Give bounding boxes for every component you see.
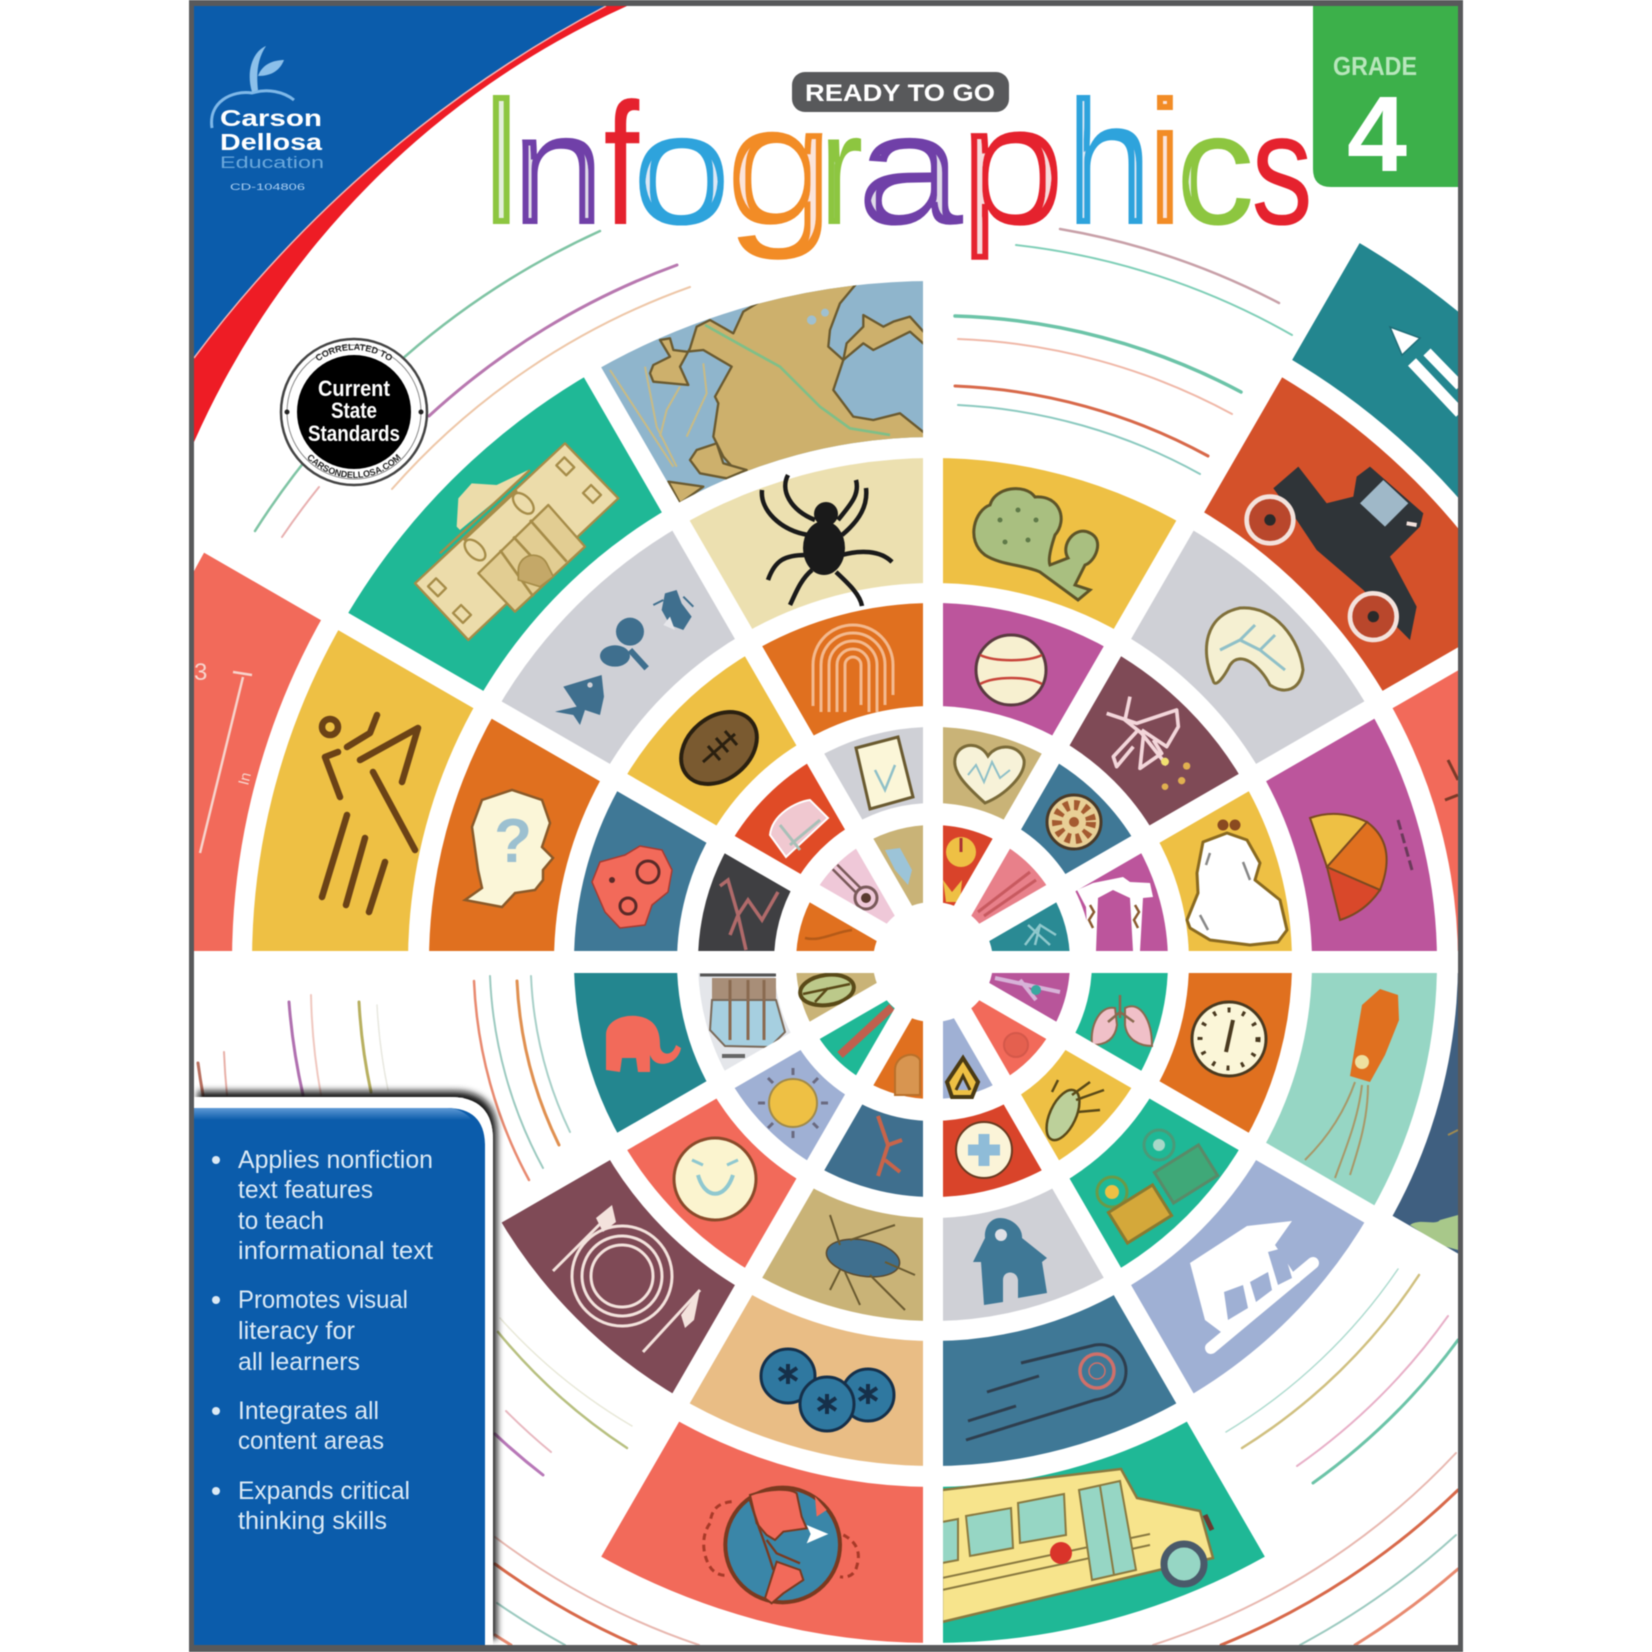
- ring 5 segment: school bus: [933, 1417, 1274, 1643]
- ring 3 segment: fingerprint: [762, 602, 924, 736]
- ring 3 segment: schoolhouse: [942, 1188, 1104, 1322]
- ring 3 segment: asteroid: [573, 790, 707, 952]
- title: Infographics: h: [1066, 63, 1152, 262]
- ring 3 segment: keys: [1069, 1098, 1240, 1268]
- grade badge: [1313, 6, 1458, 194]
- ring 4 segment: blueberries: [681, 1290, 933, 1466]
- ring 6 segment: coral ruler: In: [235, 771, 255, 787]
- ring 3 segment: cockroach: [762, 1188, 924, 1322]
- ring 2 segment: lungs: [1074, 972, 1168, 1072]
- ring 5 segment: globe: [592, 1417, 933, 1643]
- bullet: nonfiction text features: informational text: [238, 1237, 433, 1265]
- ring 1 segment: water: [873, 824, 924, 906]
- bullet: critical thinking: thinking skills: [238, 1507, 387, 1535]
- ring 5 segment: navy right edge: [1388, 962, 1614, 1302]
- title: Infographics: f: [604, 68, 640, 262]
- ready to go pill: READY TO GO: [805, 80, 995, 107]
- ring 3 segment: smile: [626, 1098, 797, 1268]
- wheel of topic segments: [193, 242, 1459, 1644]
- bullet: nonfiction text features: to teach: [238, 1207, 324, 1235]
- ring 2 segment: branch: [824, 1104, 924, 1198]
- ring 6 segment: pencil: [1284, 238, 1652, 612]
- bullet: visual literacy: [212, 1286, 408, 1376]
- bullet: nonfiction text features: Applies nonfiction: [238, 1146, 433, 1174]
- standards seal: Current: [318, 376, 391, 401]
- standards seal: Standards: [308, 421, 400, 446]
- ring 2 segment: map piece: [734, 763, 846, 874]
- bullet: nonfiction text features: text features: [238, 1176, 373, 1204]
- title: Infographics: s: [1251, 80, 1313, 259]
- title: Infographics: I: [476, 54, 526, 264]
- ring 3 segment: football: [626, 656, 797, 826]
- ring 5 segment: coral right edge: [1388, 622, 1614, 962]
- ring 1 segment: rocket: [942, 824, 994, 906]
- ring 2 segment: beetle: [1020, 1050, 1132, 1161]
- title: Infographics: [476, 54, 1313, 264]
- ring 1 segment: squiggle: [796, 902, 878, 952]
- bullet: nonfiction text features: [212, 1146, 433, 1265]
- ring 6 segment: coral ruler: [97, 544, 326, 962]
- ring 4 segment: broccoli: [933, 458, 1185, 634]
- ring 4 segment: brain: [1131, 530, 1364, 764]
- ring 3 segment: leaf: [1069, 656, 1240, 826]
- title: Infographics: c: [1176, 79, 1255, 258]
- blue corner with red swoosh: [194, 6, 627, 442]
- ring 3 segment: clock: [1159, 972, 1293, 1134]
- ring 4 segment: squid: [1261, 962, 1437, 1214]
- ring 1 segment: stripe: [819, 1000, 896, 1076]
- ring 6 segment: coral ruler: 3: [194, 659, 207, 686]
- title: Infographics: g: [725, 69, 835, 261]
- ring 2 segment: pizza: [1020, 763, 1132, 874]
- standards seal: CORRELATED TO: [315, 343, 393, 361]
- standards seal: CARSONDELLOSA.COM: [307, 453, 402, 479]
- ring 1 segment: figure: [872, 1018, 924, 1100]
- ring 4 segment: polar bear: [1122, 1152, 1370, 1398]
- bullet: critical thinking: [212, 1477, 410, 1535]
- ring 5 segment: capitol building: [343, 372, 670, 700]
- ring 3 segment: sack: [1159, 790, 1293, 952]
- ring 1 segment: clothespin: [970, 848, 1047, 924]
- ring 2 segment: sun: [734, 1050, 846, 1160]
- ring 3 segment: elephant: [573, 972, 707, 1134]
- bullet: content areas: content areas: [238, 1427, 384, 1455]
- ring 4 segment: pie chart: [1261, 710, 1437, 962]
- ring 4 segment: head with question mark: ?: [494, 807, 532, 876]
- title: Infographics: p: [958, 69, 1066, 261]
- bullet: content areas: [212, 1397, 384, 1455]
- publisher logo: [212, 46, 324, 192]
- ring 4 segment: comet: [933, 1290, 1185, 1466]
- standards seal: State: [331, 398, 377, 423]
- bullet: visual literacy: all learners: [238, 1348, 360, 1376]
- ring 2 segment: heart: [942, 726, 1042, 820]
- title: Infographics: a: [856, 80, 964, 258]
- ring 1 segment: thermometer: [820, 848, 895, 924]
- publisher logo: CD-104806: [230, 182, 305, 192]
- ring 3 segment: baseball: [942, 602, 1104, 736]
- bullet: visual literacy: Promotes visual: [238, 1286, 408, 1314]
- grade badge: GRADE: [1333, 51, 1417, 81]
- ring 2 segment: curtain: [698, 972, 790, 1070]
- ring 1 segment: flame: [942, 1018, 993, 1100]
- ring 4 segment: plate and cutlery: [496, 1152, 744, 1398]
- ring 4 segment: fish, leaf and bug: [496, 526, 744, 772]
- publisher logo: Education: [220, 153, 324, 172]
- title: Infographics: n: [511, 80, 605, 258]
- grade badge: 4: [1347, 73, 1407, 194]
- ring 5 segment: historic map: [592, 281, 933, 507]
- ring 5 segment: javelin thrower: [252, 622, 478, 962]
- ring 4 segment: head with question mark: [429, 710, 605, 962]
- ring 2 segment: constellation: [698, 852, 791, 952]
- bullet: content areas: Integrates all: [238, 1397, 379, 1425]
- standards seal: [279, 337, 429, 487]
- ring 4 segment: spider: [681, 458, 933, 634]
- ring 2 segment: columns: [1075, 852, 1168, 952]
- ready to go pill: [792, 72, 1009, 112]
- title: Infographics: o: [632, 79, 731, 258]
- ring 1 segment: molecule: [988, 902, 1070, 952]
- ring 2 segment: medical cross: [942, 1104, 1042, 1198]
- ring 1 segment: peace leaf: [796, 972, 878, 1022]
- feature list panel: [194, 1097, 493, 1645]
- decorative arcs: [198, 229, 1458, 1645]
- bullet: visual literacy: literacy for: [238, 1317, 355, 1345]
- ring 1 segment: dragonfly: [988, 972, 1070, 1022]
- cover border: [189, 0, 1463, 1652]
- ring 5 segment: antique car: [1196, 372, 1523, 700]
- title: Infographics: i: [1145, 63, 1185, 262]
- ring 2 segment: notepad: [824, 726, 924, 820]
- publisher logo: Carson: [220, 105, 322, 131]
- bullet: critical thinking: Expands critical: [238, 1477, 410, 1505]
- title: Infographics: r: [819, 80, 863, 259]
- publisher logo: Dellosa: [220, 129, 322, 155]
- book cover page: [194, 6, 1458, 1645]
- ring 1 segment: cell: [970, 1000, 1047, 1076]
